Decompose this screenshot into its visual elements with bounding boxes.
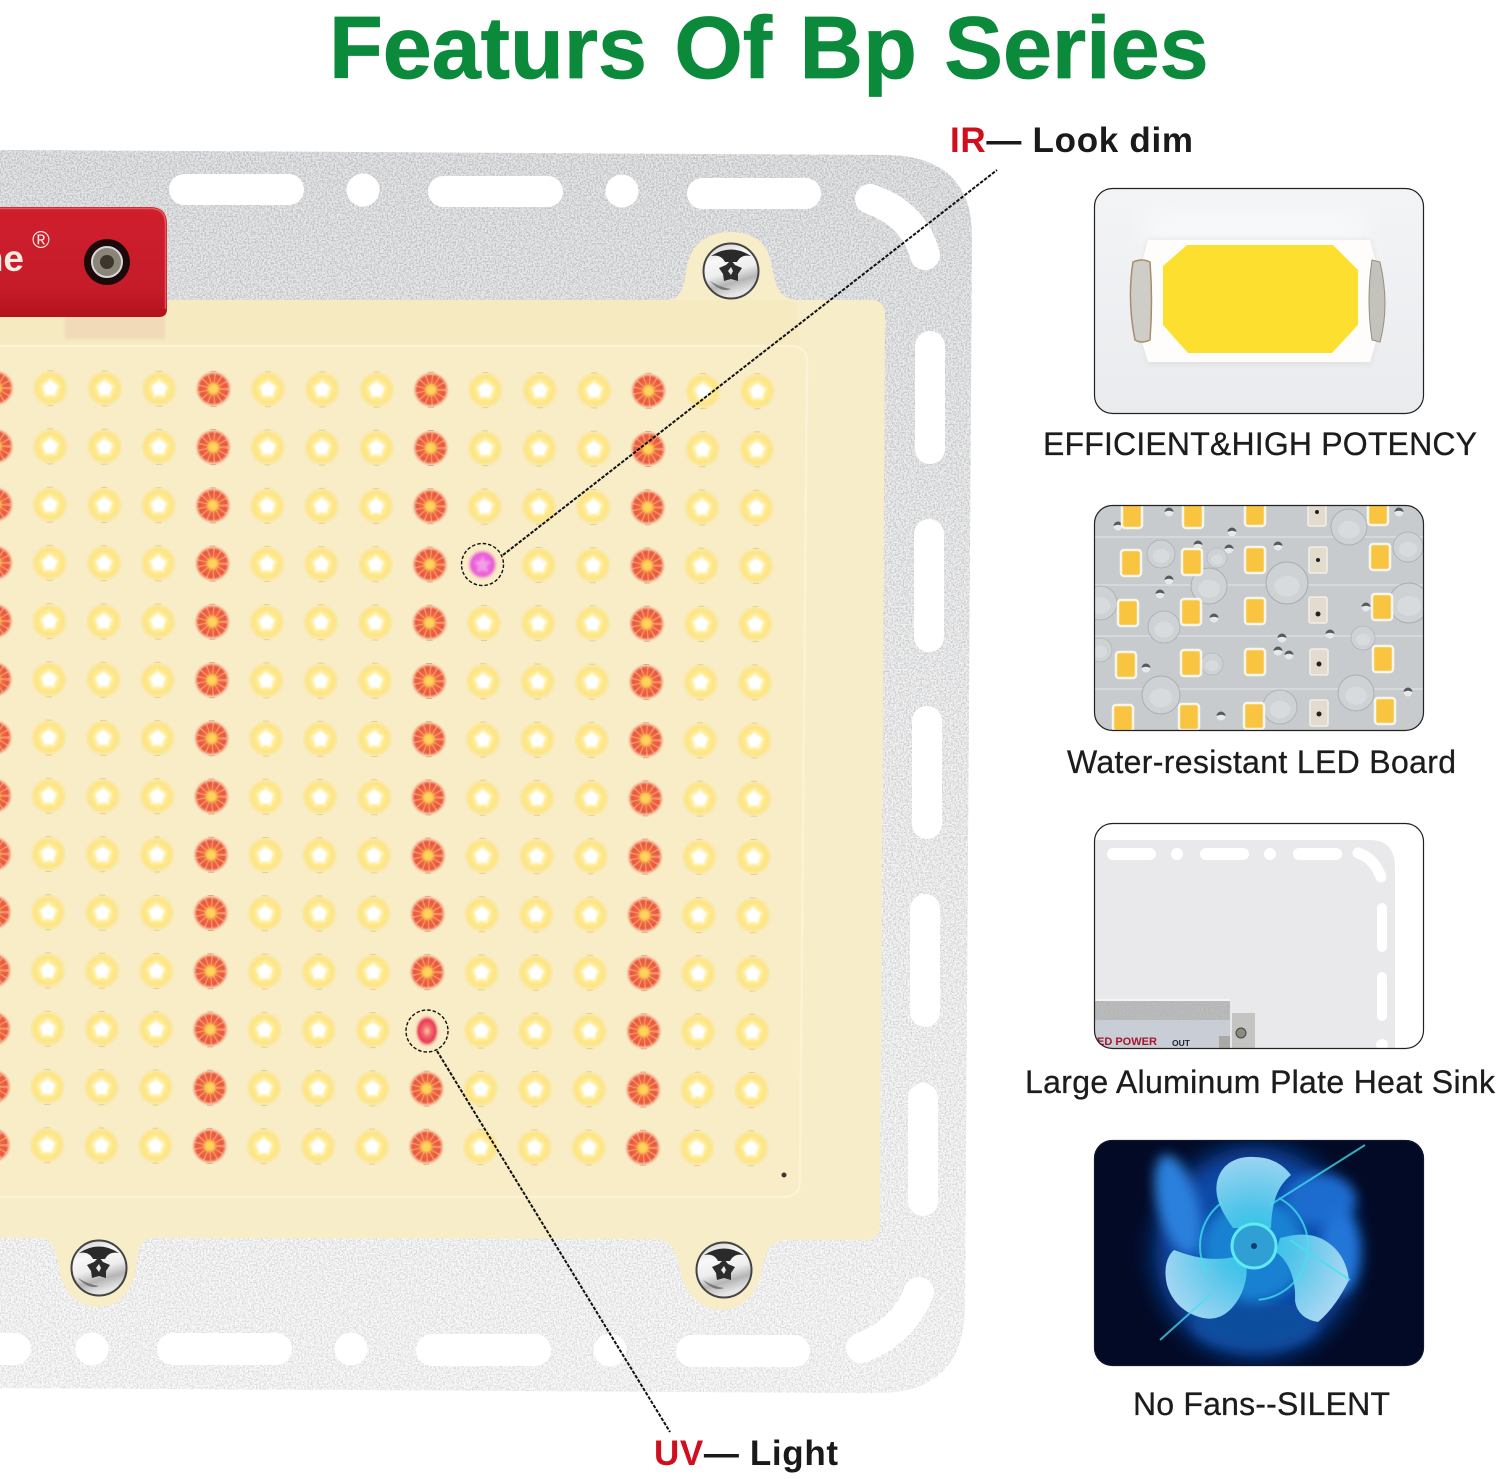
red driver block: ® [32,227,50,254]
title: Featurs Of Bp Series [329,0,1209,97]
panel: no fans [1094,1140,1424,1366]
arrow: IR leader line [503,170,997,555]
fan hub [1232,1224,1276,1268]
arrow: UV leader line [437,1051,670,1432]
LED chip body [1130,240,1385,365]
caption: no fans: No Fans--SILENT [1133,1386,1390,1422]
screw: bottom left [72,1240,126,1296]
red driver block [0,207,167,339]
fan blades [1165,1157,1349,1322]
power driver box [1094,999,1255,1049]
small board dot [782,1172,786,1178]
power driver box: ED POWER [1097,1036,1157,1048]
screw: bottom right [696,1242,752,1298]
caption: efficient: EFFICIENT&HIGH POTENCY [1043,426,1477,462]
water droplets [1083,508,1429,724]
LED grid [0,370,776,1167]
panel: LED grow light board [0,150,972,1393]
label: UV: UV— Light [654,1434,838,1473]
caption: water-resistant: Water-resistant LED Board [1067,744,1456,780]
label: IR: IR— Look dim [950,121,1193,160]
panel: water-resistant board [1083,499,1429,731]
caption: heat sink: Large Aluminum Plate Heat Sink [1025,1064,1496,1100]
IR LED highlight [462,544,504,586]
power driver box: OUT [1172,1038,1191,1048]
LED chips [1113,499,1395,731]
UV LED highlight [406,1010,448,1052]
cream circuit board [0,232,885,1310]
aluminium plate with mounting slots [0,150,972,1393]
panel: aluminium heat sink [1090,823,1424,1060]
panel: efficient LED chip [1094,188,1424,414]
unlit UV and IR chips [1308,500,1328,726]
screw: top right [704,244,758,298]
